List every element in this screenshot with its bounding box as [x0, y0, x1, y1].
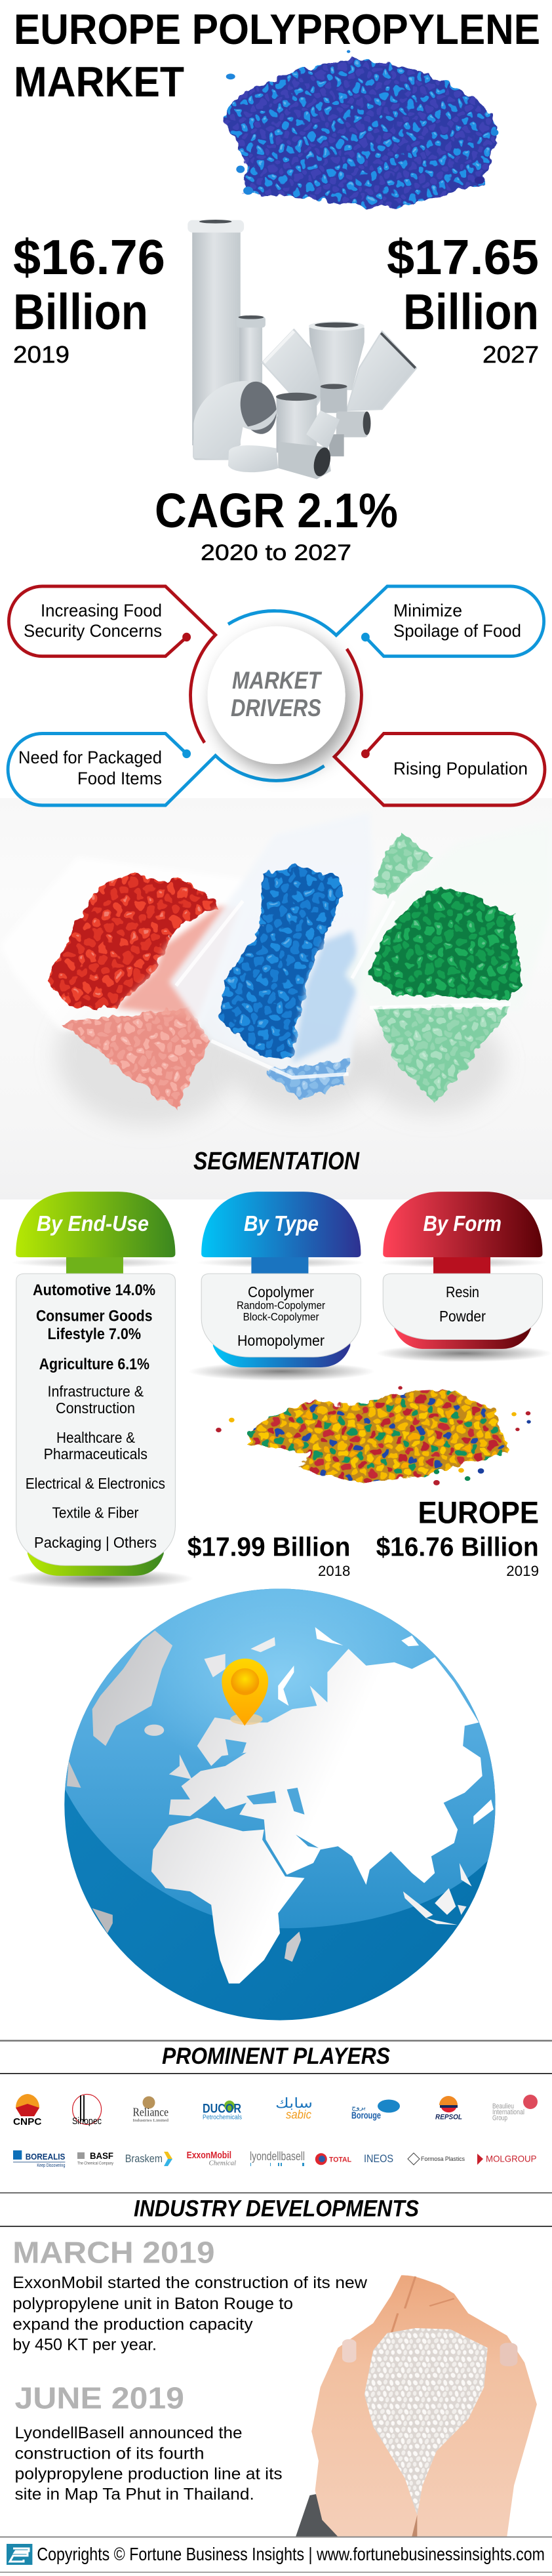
logo: Formosa Plastics: Formosa Plastics	[421, 2156, 465, 2163]
logos row 1	[13, 2094, 538, 2127]
list of type segments: Copolymer	[248, 1283, 314, 1300]
stat: Europe market values: $17.99 Billion	[187, 1532, 350, 1562]
CAGR callout	[155, 483, 398, 565]
list of end-use segments: Packaging | Others	[34, 1534, 157, 1551]
list of end-use segments: Electrical & Electronics	[26, 1475, 165, 1492]
stat: 2019 market size: $16.76	[13, 230, 165, 285]
logo: Sabic: sabic	[286, 2108, 311, 2122]
stat: 2019 market size: Billion	[13, 284, 148, 340]
list of end-use segments: Automotive 14.0%	[33, 1281, 155, 1299]
development: March 2019: polypropylene unit in Baton Rouge to	[12, 2295, 293, 2313]
driver: rising population: Rising Population	[393, 759, 528, 778]
heading: market drivers: MARKET	[232, 667, 323, 694]
list of end-use segments: Textile & Fiber	[52, 1504, 139, 1521]
logo: Reliance: Industries Limited	[132, 2119, 168, 2123]
stat: Europe market values: 2018	[318, 1563, 350, 1579]
logo: Beaulieu International Group	[492, 2095, 538, 2122]
logo: Reliance	[132, 2096, 168, 2123]
footer	[0, 2537, 552, 2573]
stat: 2027 market size: $17.65	[387, 230, 539, 285]
stat: Europe market values: $16.76 Billion	[376, 1532, 539, 1562]
logo: Borealis: BOREALIS	[26, 2152, 66, 2162]
stat: Europe market values: EUROPE	[418, 1495, 539, 1529]
CAGR callout: 2020 to 2027	[201, 540, 351, 565]
logo: Sabic	[275, 2096, 313, 2122]
list of type segments	[237, 1283, 325, 1349]
list of end-use segments: Infrastructure &	[47, 1383, 144, 1400]
stat: 2027 market size	[387, 230, 539, 368]
heading: prominent players: PROMINENT PLAYERS	[162, 2043, 390, 2069]
driver: increasing food security concerns	[24, 601, 162, 641]
title	[14, 5, 540, 106]
image: multicoloured pellets	[216, 1386, 531, 1485]
logos row 2	[13, 2150, 536, 2168]
header label: By Form	[424, 1211, 502, 1236]
list of form segments	[439, 1283, 486, 1325]
heading: segmentation: SEGMENTATION	[193, 1148, 360, 1175]
logo: Borouge: Borouge	[351, 2110, 381, 2122]
stat: Europe market values	[187, 1495, 539, 1579]
connector outlines	[8, 586, 545, 805]
logo: Repsol	[435, 2096, 462, 2122]
stat: Europe market values: 2019	[506, 1563, 539, 1579]
driver: need for packaged food items: Food Items	[77, 769, 162, 788]
list of form segments: Powder	[439, 1308, 486, 1325]
stat: 2019 market size: 2019	[13, 341, 69, 368]
image: grey plastic pipes	[187, 220, 416, 479]
logo: Formosa Plastics	[408, 2153, 465, 2165]
panel: by type	[188, 1192, 375, 1381]
logo: BASF	[77, 2150, 113, 2166]
heading: industry developments: INDUSTRY DEVELOPMENTS	[134, 2196, 419, 2221]
development: June 2019: site in Map Ta Phut in Thailand.	[14, 2485, 254, 2504]
section lines: industry developments	[0, 2192, 552, 2227]
centre circle	[208, 626, 345, 764]
logo: Braskem: Braskem	[125, 2152, 163, 2165]
panel: market drivers	[8, 586, 545, 805]
logo: Ducor Petrochemicals: Petrochemicals	[203, 2114, 242, 2122]
panel: by end-use	[7, 1192, 193, 1588]
logo: CNPC	[13, 2094, 42, 2127]
driver: need for packaged food items	[18, 748, 162, 788]
development: March 2019	[12, 2236, 368, 2354]
list of end-use segments: Construction	[56, 1399, 135, 1417]
logo: Borealis: Keep Discovering	[37, 2163, 65, 2168]
logo: Borouge	[351, 2100, 400, 2122]
CAGR callout: CAGR 2.1%	[155, 483, 398, 538]
list of end-use segments: Agriculture 6.1%	[39, 1356, 149, 1373]
icon: Fortune Business Insights logo	[7, 2544, 32, 2565]
logo: MOL Group: MOLGROUP	[486, 2154, 536, 2164]
stat: 2027 market size: 2027	[483, 341, 539, 368]
logo: Beaulieu International Group: Beaulieu	[492, 2103, 514, 2110]
image: plastic bags with red, blue and green pellets	[0, 813, 552, 1125]
logo: Beaulieu International Group: Group	[492, 2114, 507, 2122]
list of type segments: Homopolymer	[237, 1332, 325, 1349]
logo: Ineos: INEOS	[364, 2152, 393, 2165]
list of type segments: Block-Copolymer	[243, 1311, 319, 1323]
development: June 2019: JUNE 2019	[14, 2381, 184, 2415]
logo: ExxonMobil Chemical: Chemical	[208, 2160, 236, 2167]
image background: pellet bags	[0, 798, 552, 1199]
list of end-use segments: Consumer Goods	[36, 1308, 152, 1325]
heading: market drivers	[231, 667, 323, 721]
stat: 2019 market size	[13, 230, 165, 368]
development: March 2019: MARCH 2019	[12, 2236, 215, 2270]
title: MARKET	[14, 58, 184, 106]
logo: ExxonMobil Chemical: ExxonMobil	[187, 2150, 231, 2161]
logo: Borealis	[13, 2150, 66, 2168]
logo: BASF: BASF	[90, 2150, 113, 2161]
driver: minimize spoilage of food	[393, 601, 521, 641]
logo: Reliance: Reliance	[132, 2106, 168, 2119]
logo: LyondellBasell: lyondellbasell	[250, 2150, 305, 2163]
logo: Beaulieu International Group: International	[492, 2108, 524, 2116]
development: March 2019: ExxonMobil started the construction of its new	[12, 2274, 368, 2292]
list of type segments: Random-Copolymer	[237, 1299, 325, 1312]
logo: Borouge: بروج	[351, 2104, 366, 2112]
header label: By End-Use	[37, 1211, 149, 1236]
logo: Sinopec: Sinopec	[72, 2116, 102, 2127]
development: June 2019	[14, 2381, 283, 2504]
development: June 2019: polypropylene production line at its	[14, 2465, 283, 2484]
logo: Sabic: سابك	[275, 2096, 313, 2111]
heading: market drivers: DRIVERS	[231, 694, 321, 721]
header label: By Type	[244, 1211, 319, 1236]
development: June 2019: construction of its fourth	[14, 2445, 205, 2463]
list of end-use segments: Lifestyle 7.0%	[47, 1325, 141, 1343]
logo: Ducor Petrochemicals: DUCOR	[203, 2103, 241, 2116]
image: blue polypropylene pellets pile	[226, 50, 498, 208]
image: hands holding white pellets	[296, 2275, 537, 2537]
list of end-use segments: Healthcare &	[56, 1429, 135, 1446]
section lines: prominent players	[0, 2040, 552, 2074]
icon: location pin	[222, 1659, 268, 1726]
driver: increasing food security concerns: Security Concerns	[24, 621, 162, 641]
logo: Repsol: REPSOL	[435, 2114, 462, 2122]
driver: need for packaged food items: Need for Packaged	[18, 748, 162, 767]
list of end-use segments: Pharmaceuticals	[44, 1445, 148, 1462]
driver: minimize spoilage of food: Spoilage of Food	[393, 621, 521, 641]
logo: ExxonMobil Chemical	[187, 2150, 236, 2167]
logo: Total: TOTAL	[329, 2156, 351, 2164]
logo: CNPC: CNPC	[13, 2116, 42, 2127]
panel: by form	[376, 1192, 552, 1362]
driver: minimize spoilage of food: Minimize	[393, 601, 462, 620]
logo: LyondellBasell	[250, 2150, 305, 2166]
development: March 2019: by 450 KT per year.	[12, 2336, 157, 2354]
logo: Sinopec	[72, 2095, 102, 2127]
list of form segments: Resin	[446, 1283, 479, 1300]
logo: Ducor Petrochemicals	[203, 2101, 242, 2122]
logo: BASF: The Chemical Company	[77, 2162, 113, 2166]
development: June 2019: LyondellBasell announced the	[14, 2424, 243, 2442]
driver: increasing food security concerns: Increasing Food	[41, 601, 162, 620]
list of end-use segments	[26, 1281, 165, 1551]
logo: Total	[315, 2153, 351, 2165]
globe map with location pin	[56, 1575, 500, 2021]
development: March 2019: expand the production capacity	[12, 2316, 253, 2334]
